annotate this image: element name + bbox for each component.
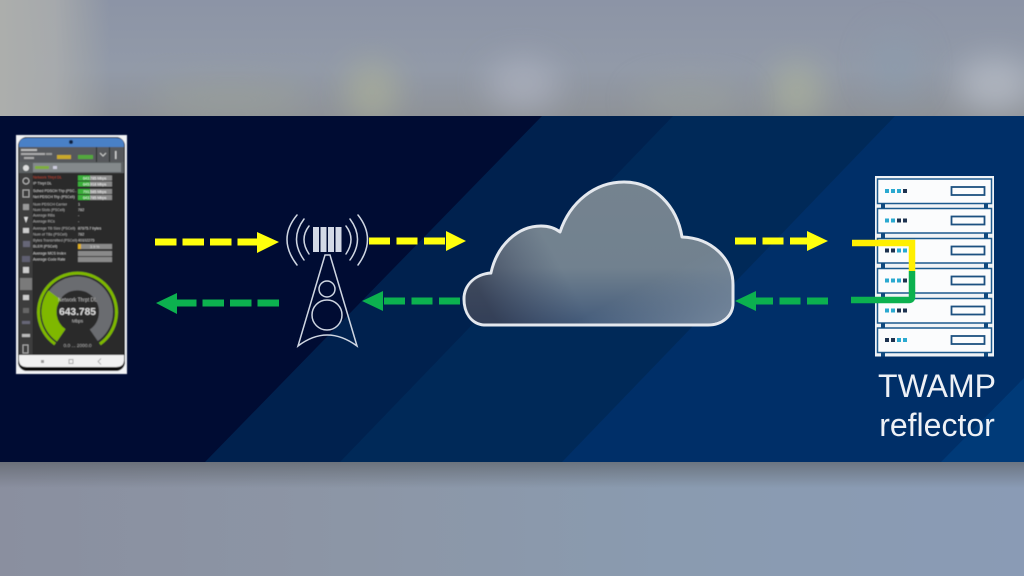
phone toolbar — [19, 162, 124, 173]
icon: server rack — [875, 176, 994, 356]
arrow: green tower to phone — [156, 293, 279, 314]
arrow: yellow cloud to reflector — [735, 231, 828, 251]
label: TWAMP reflector — [878, 368, 996, 443]
phone metric table: - — [78, 214, 80, 218]
server unit 5 — [878, 298, 992, 323]
tower body — [298, 255, 357, 346]
phone status bar — [19, 138, 124, 147]
phone metric table: 782 — [78, 208, 84, 212]
phone metric table: Average TB Size (PSCell) — [33, 226, 75, 230]
phone navigation bar — [19, 355, 124, 367]
phone metric table — [33, 176, 112, 262]
phone throughput gauge — [38, 273, 116, 349]
icon: cloud — [464, 182, 733, 325]
phone metric table: Sched PDSCH Thp (PSC.. — [33, 189, 77, 193]
phone metric table: Num of TBs (PSCell) — [33, 232, 67, 236]
phone metric table: Bytes Transmitted (PSCell) — [33, 238, 77, 242]
phone throughput gauge: 0.0 ... 2000.0 — [63, 343, 92, 349]
phone metric table: 782 — [78, 232, 84, 236]
dark blue banner background — [0, 116, 1024, 462]
phone metric table: 643.785 Mbps — [83, 196, 107, 200]
arrow: yellow phone to tower — [155, 232, 279, 253]
phone metric table: Average MCS Index — [33, 252, 66, 256]
phone metric table: - — [78, 220, 80, 224]
arrow: green cloud to tower — [362, 291, 460, 311]
reflector loop: yellow in — [852, 243, 912, 271]
blurred top band — [0, 0, 1024, 122]
phone metric table: 791.585 Mbps — [83, 190, 107, 194]
phone metric table: 3.9 % — [90, 245, 100, 249]
phone metric table: Num PDSCH Carrier — [33, 202, 68, 206]
tower signal waves — [287, 215, 368, 265]
phone metric table: 1 — [78, 202, 80, 206]
blurred bottom band — [0, 462, 1024, 576]
phone throughput gauge: Network Thrpt DL — [58, 298, 97, 304]
label: TWAMP reflector: TWAMP — [878, 368, 996, 404]
tower antenna panels — [313, 227, 342, 252]
rack connectors — [881, 204, 988, 356]
arrow: yellow tower to cloud — [369, 231, 466, 251]
phone side menu — [19, 173, 32, 356]
phone metric table: 87675.7 bytes — [78, 226, 101, 230]
phone metric table: BLER (PSCell) — [33, 244, 57, 248]
server unit 4 — [878, 268, 992, 293]
server unit 2 — [878, 208, 992, 233]
phone throughput gauge: 643.785 — [59, 307, 96, 318]
phone metric table: Average Code Rate — [33, 258, 65, 262]
arrow: green reflector to cloud — [735, 291, 828, 311]
server unit 3 — [878, 238, 992, 263]
phone throughput gauge: Mbps — [72, 318, 84, 324]
phone metric table: 40102275 — [78, 238, 94, 242]
phone metric table: Network Thrpt DL — [33, 176, 62, 180]
phone metric table: Num Slots (PSCell) — [33, 208, 65, 212]
label: TWAMP reflector: reflector — [879, 407, 995, 443]
phone screenshot — [16, 135, 127, 374]
phone metric table: Average RBs — [33, 214, 55, 218]
phone metric table: IP Thrpt DL — [33, 182, 52, 186]
phone status header — [19, 147, 124, 162]
icon: cell tower — [287, 215, 368, 346]
reflector loop: green out — [851, 271, 912, 300]
phone metric table: 645.918 Mbps — [83, 182, 107, 186]
phone metric table: Average RCs — [33, 220, 55, 224]
phone metric table: Net PDSCH Thp (PSCell) — [33, 195, 75, 199]
server unit 1 — [878, 179, 992, 204]
server unit 6 — [878, 328, 992, 352]
phone metric table: 643.785 Mbps — [83, 176, 107, 180]
